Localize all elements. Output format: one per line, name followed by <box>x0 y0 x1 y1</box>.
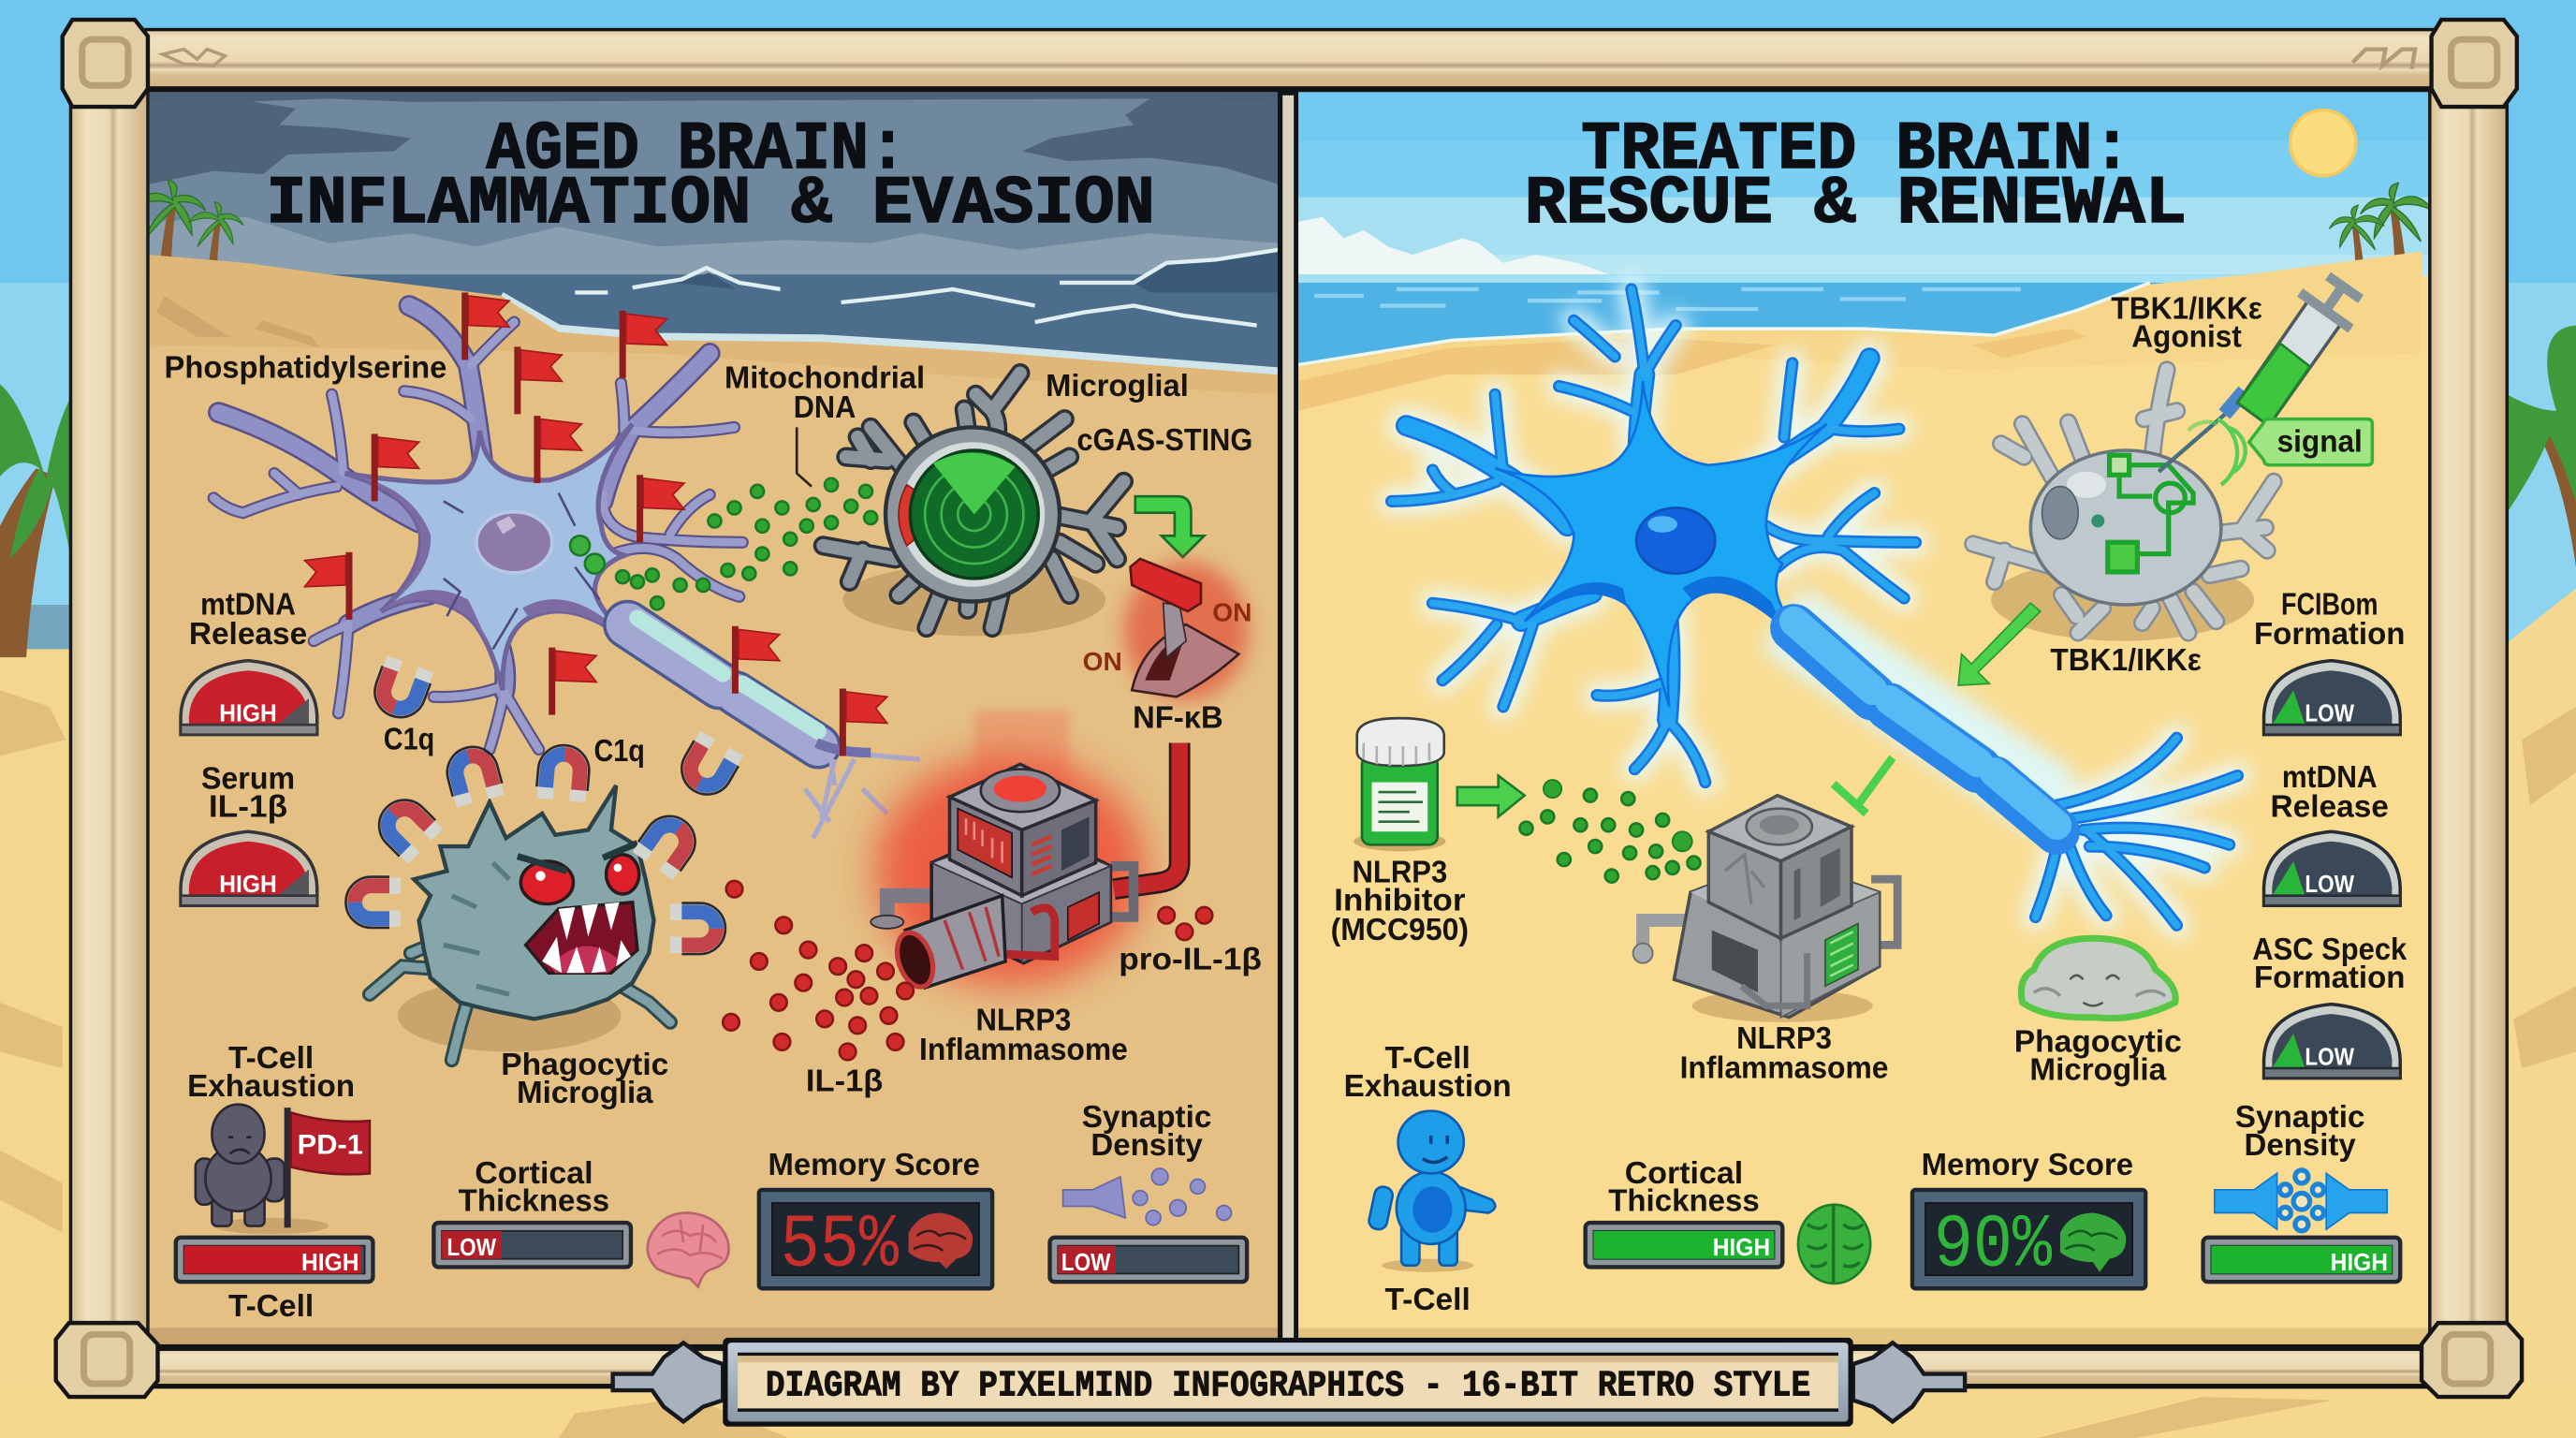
sun <box>2291 110 2356 176</box>
label: T-cell aged: T-Cell <box>228 1289 314 1324</box>
icon: weak synapse <box>1063 1168 1231 1225</box>
mitochondrial DNA dots <box>570 478 877 609</box>
T-cell exhaustion treated: T-Cell <box>1385 1041 1471 1076</box>
gauge: ASC speck low <box>2252 932 2408 1078</box>
synaptic density aged: Synaptic <box>1082 1100 1211 1135</box>
on labels: ON <box>1212 598 1251 627</box>
panel: treated brain <box>1298 92 2433 1347</box>
inhibition mark <box>1834 757 1893 814</box>
memory score aged: Memory Score <box>768 1148 980 1182</box>
corner: top right <box>2432 20 2517 107</box>
footer banner: DIAGRAM BY PIXELMIND INFOGRAPHICS - 16-BIT RETRO STYLE <box>766 1365 1810 1406</box>
frame: left bar <box>69 91 150 1356</box>
C1q magnets <box>345 655 744 954</box>
cortical thickness aged: Cortical <box>475 1156 593 1191</box>
memory score treated: Memory Score <box>1922 1148 2133 1182</box>
memory score treated <box>1912 1148 2145 1289</box>
bar: T-cell high: HIGH <box>301 1248 359 1276</box>
axon <box>627 618 920 838</box>
gauge: mtDNA low: mtDNA <box>2282 760 2378 795</box>
exhausted T-cell figure <box>196 1105 285 1226</box>
arrow: cGAS-STING to NF-kB <box>1135 496 1204 557</box>
PD-1 flag <box>285 1108 370 1227</box>
cortical thickness aged: LOW <box>446 1233 496 1261</box>
frame: bottom bar <box>144 1344 2435 1388</box>
label: agonist: TBK1/IKKε <box>2111 292 2262 327</box>
icon: pink brain <box>648 1212 729 1287</box>
gauge: serum IL-1b high: IL-1β <box>209 789 287 824</box>
synaptic density treated: Density <box>2244 1128 2356 1163</box>
label: NLRP3 inflammasome aged <box>919 1004 1128 1067</box>
memory score aged: 55% <box>781 1204 900 1289</box>
gauge: serum IL-1b high <box>181 762 317 905</box>
title: treated brain: RESCUE & RENEWAL <box>1525 166 2187 242</box>
left palm <box>0 378 72 657</box>
signal tag: signal <box>2277 425 2363 460</box>
PD-1 flag: PD-1 <box>298 1129 363 1160</box>
cortical thickness treated: HIGH <box>1713 1233 1770 1261</box>
memory score treated: 90% <box>1934 1204 2053 1289</box>
T-cell exhaustion treated: Exhaustion <box>1344 1069 1512 1104</box>
synaptic density treated <box>2203 1100 2400 1282</box>
signal tag <box>2249 419 2372 465</box>
label: NLRP3 inhibitor <box>1331 856 1469 947</box>
nucleus <box>1636 507 1715 574</box>
cortical thickness treated: Cortical <box>1625 1156 1743 1191</box>
frame: top bar <box>144 28 2435 92</box>
corner: bottom right <box>2422 1323 2522 1397</box>
phagocytic microglia monster <box>370 785 670 1060</box>
label: IL-1b: IL-1β <box>806 1064 883 1099</box>
label: NLRP3 inhibitor: Inhibitor <box>1334 884 1466 918</box>
signal rings <box>2188 419 2246 485</box>
gauge: FOBom formation: LOW <box>2305 699 2354 727</box>
palm pair <box>133 180 243 272</box>
label: phagocytic microglia <box>501 1048 668 1110</box>
stormy sky <box>133 92 1278 276</box>
ornament right <box>1853 1343 1965 1421</box>
treated microglia <box>1973 370 2274 641</box>
right palm <box>2507 326 2576 567</box>
label: pro-IL-1b: pro-IL-1β <box>1119 943 1262 977</box>
gauge: ASC speck low: LOW <box>2305 1043 2354 1071</box>
gauge: serum IL-1b high: Serum <box>201 762 295 797</box>
gauge: FOBom formation: Formation <box>2254 617 2405 652</box>
arrow: inhibitor <box>1457 776 1525 816</box>
synaptic density aged: Density <box>1090 1128 1203 1163</box>
palm pair <box>2329 183 2433 276</box>
NLRP3 inflammasome, inactive <box>1633 796 1897 1022</box>
label: C1q right: C1q <box>593 734 645 769</box>
lower block <box>931 822 1110 963</box>
on labels <box>1083 598 1251 676</box>
pro-IL-1b particles <box>1158 907 1212 940</box>
ornament left <box>613 1343 723 1421</box>
cortical thickness treated <box>1586 1156 1782 1267</box>
synaptic density aged <box>1050 1100 1247 1282</box>
treated neuron <box>1392 289 2237 925</box>
gauge: FOBom formation <box>2254 588 2405 735</box>
arrow: TBK1 to neuron <box>1958 603 2041 685</box>
label: NLRP3 inhibitor: (MCC950) <box>1331 913 1469 947</box>
corner: bottom left <box>56 1323 157 1397</box>
flags: phosphatidylserine <box>305 292 887 756</box>
panel: aged brain <box>133 92 1278 1347</box>
label: C1q left: C1q <box>384 722 434 756</box>
gauge: mtDNA release high: Release <box>189 617 307 652</box>
cortical thickness aged: Thickness <box>459 1184 609 1219</box>
stormy sea <box>150 250 1278 394</box>
circuit <box>2108 455 2193 572</box>
label: TBK1/IKKe: TBK1/IKKε <box>2050 643 2202 678</box>
NLRP3 inflammasome, active <box>871 710 1179 991</box>
T-cell exhaustion aged: T-Cell <box>228 1041 314 1076</box>
title: aged brain: INFLAMMATION & EVASION <box>266 166 1155 242</box>
label: T-cell treated: T-Cell <box>1385 1283 1471 1317</box>
label: phosphatidylserine: Phosphatidylserine <box>165 351 446 386</box>
footer banner <box>613 1338 1965 1427</box>
gauge: mtDNA low: LOW <box>2305 870 2354 898</box>
icon: green brain <box>1798 1205 1870 1284</box>
label: NF-kB: NF-κB <box>1133 701 1223 736</box>
icon: dark red brain <box>909 1213 973 1269</box>
label: mitochondrial DNA: Mitochondrial <box>724 360 925 395</box>
title: treated brain: TREATED BRAIN: <box>1581 111 2131 188</box>
gauge: FOBom formation: FCIBom <box>2281 588 2378 623</box>
synaptic density treated: HIGH <box>2331 1248 2388 1276</box>
gauge: mtDNA low <box>2264 760 2400 905</box>
eyes <box>518 844 639 903</box>
gauge: mtDNA release high <box>181 588 317 735</box>
T-cell exhaustion treated <box>1344 1041 1512 1272</box>
inhibitor particles <box>1519 780 1701 883</box>
label: mitochondrial DNA: DNA <box>794 390 856 425</box>
label: NLRP3 inflammasome treated <box>1680 1021 1888 1086</box>
corner: top left <box>63 20 148 107</box>
label: NLRP3 inflammasome treated: Inflammasome <box>1680 1051 1888 1086</box>
neuron glow <box>1392 289 2237 925</box>
label: NLRP3 inflammasome aged: NLRP3 <box>976 1004 1071 1038</box>
calm phagocytic microglia <box>2021 938 2175 1019</box>
label: agonist <box>2111 292 2262 354</box>
axon segments <box>1794 622 2056 831</box>
label: NLRP3 inflammasome treated: NLRP3 <box>1736 1021 1832 1056</box>
label: phagocytic microglia treated: Phagocytic <box>2014 1024 2182 1059</box>
T-cell exhaustion aged: Exhaustion <box>187 1069 355 1104</box>
gauge: ASC speck low: ASC Speck <box>2252 932 2408 967</box>
T-cell exhaustion aged <box>187 1041 370 1234</box>
label: microglial: Microglial <box>1046 369 1189 404</box>
label: cGAS-STING: cGAS-STING <box>1076 423 1252 458</box>
label: NLRP3 inhibitor: NLRP3 <box>1352 856 1447 890</box>
syringe <box>2159 276 2361 472</box>
nucleus <box>476 512 552 573</box>
label: NLRP3 inflammasome aged: Inflammasome <box>919 1033 1128 1067</box>
on labels: ON <box>1083 647 1122 676</box>
synaptic density aged: LOW <box>1061 1248 1111 1276</box>
microglia with radar <box>823 373 1123 636</box>
title: aged brain <box>266 111 1155 242</box>
gauge: ASC speck low: Formation <box>2254 961 2405 995</box>
NLRP3 inhibitor bottle <box>1354 718 1445 851</box>
cortical thickness treated: Thickness <box>1608 1184 1760 1219</box>
clear sky <box>1298 92 2433 276</box>
label: mitochondrial DNA <box>724 360 925 487</box>
cortical thickness aged <box>433 1156 631 1267</box>
upper block <box>949 764 1096 829</box>
label: phagocytic microglia: Phagocytic <box>501 1048 668 1082</box>
calm sea <box>1298 252 2422 411</box>
mouth <box>526 902 637 973</box>
gauge: mtDNA release high: HIGH <box>219 699 277 727</box>
IL-1b particles <box>723 881 914 1060</box>
frame: centre divider <box>1278 89 1298 1347</box>
frame: right bar <box>2428 91 2509 1356</box>
memory score aged <box>759 1148 992 1289</box>
radar <box>910 450 1038 579</box>
gauge: serum IL-1b high: HIGH <box>219 870 277 898</box>
gauge: mtDNA low: Release <box>2271 789 2389 824</box>
NF-kB switch <box>1083 559 1251 700</box>
synaptic density treated: Synaptic <box>2235 1100 2364 1135</box>
title: treated brain <box>1525 111 2187 242</box>
icon: green monitor brain <box>2060 1213 2126 1272</box>
gauge: mtDNA release high: mtDNA <box>200 588 296 623</box>
bar: T-cell high <box>176 1238 373 1282</box>
healthy T-cell figure <box>1368 1111 1495 1266</box>
title: aged brain: AGED BRAIN: <box>487 111 907 188</box>
label: phagocytic microglia: Microglia <box>517 1076 653 1110</box>
aged neuron <box>213 306 920 838</box>
label: agonist: Agonist <box>2131 319 2242 354</box>
label: phagocytic microglia treated: Microglia <box>2029 1052 2167 1087</box>
barrel <box>905 896 1005 988</box>
icon: strong synapse <box>2215 1170 2387 1231</box>
label: phagocytic microglia treated <box>2014 1024 2182 1087</box>
